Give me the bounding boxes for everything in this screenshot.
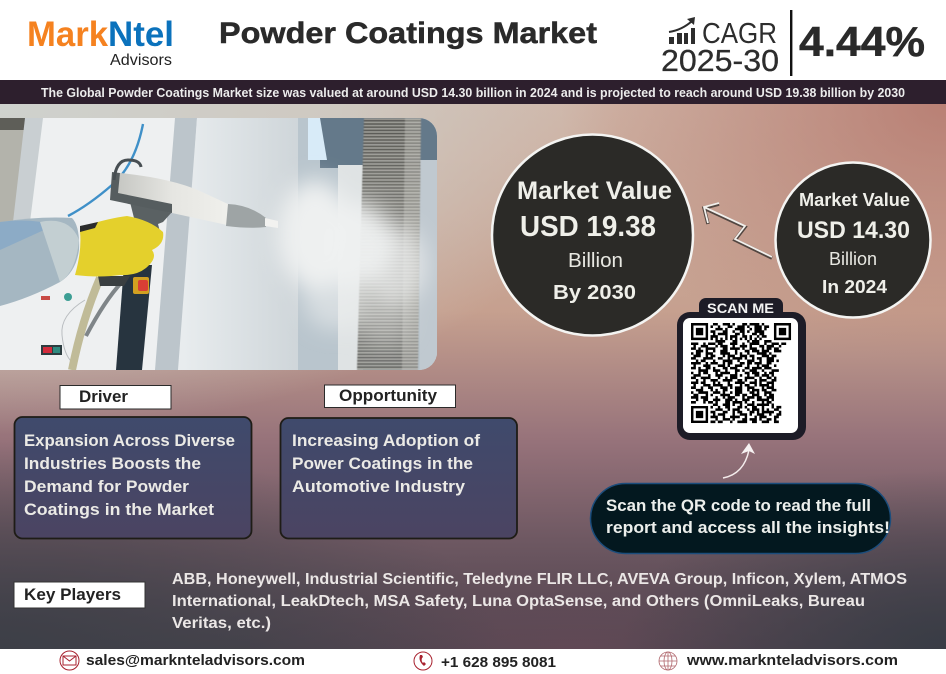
icon: growth bars and arrow [669,17,695,44]
indicators [41,293,72,355]
title: Powder Coatings Market [219,17,597,50]
text: key players list: International, LeakDtech, MSA Safety, Luna OptaSense, and Others (OmniLeaks, Bureau [172,593,865,610]
yellow glove [75,216,163,276]
spray cloud [277,180,427,346]
arrow: growth zigzag [704,203,772,258]
callout: scan the QR code: Scan the QR code to read the full [606,497,871,515]
logo: MarkNtel Advisors: Ntel [108,15,174,54]
panel: driver [14,417,252,538]
circle: market value 2024: USD 14.30 [797,217,910,244]
scan me tab [699,298,783,318]
summary bar: The Global Powder Coatings Market size was valued at around USD 14.30 billion in 2024 and is projected to reach around USD 19.38 billion by 2030 [41,86,905,100]
logo: MarkNtel Advisors: Advisors [110,52,172,69]
heading: Opportunity [324,385,456,408]
QR code card [677,298,806,440]
circle: market value 2030 [492,134,693,336]
callout: scan the QR code [590,484,890,554]
photo: powder coating spray gun [0,118,437,370]
blue hose [68,124,143,216]
logo: MarkNtel Advisors: Mark [27,15,109,54]
circle: market value 2024: In 2024 [822,277,887,297]
text: key players list: Veritas, etc.) [172,615,271,632]
circle: market value 2024 [776,162,930,318]
CAGR block: 4.44% [799,18,925,65]
panel: driver: Expansion Across Diverse [24,431,235,450]
summary bar [0,80,946,104]
icon: globe [659,652,677,670]
circle: market value 2024: Market Value [799,190,910,210]
text: key players list [172,571,907,632]
icon: mail [60,651,79,670]
heading: Driver [60,386,171,409]
footer: phone: +1 628 895 8081 [441,654,556,671]
heading: Key Players [14,582,145,608]
CAGR block: CAGR [702,18,777,50]
sleeve [0,218,79,306]
machine post [116,265,152,370]
scan me tab: SCAN ME [707,300,774,316]
panel: opportunity: Power Coatings in the [292,454,473,473]
arrow: curved pointer to QR [723,443,755,478]
CAGR block: 2025-30 [661,43,779,78]
footer: website: www.marknteladvisors.com [686,652,898,669]
icon: phone [414,652,432,670]
callout: scan the QR code: report and access all the insights! [606,519,890,537]
panel: driver: Coatings in the Market [24,500,214,519]
circle: market value 2030: Market Value [517,177,672,205]
QR modules [691,324,790,422]
footer band [0,649,946,674]
heading: Key Players: Key Players [24,586,121,604]
header band [0,0,946,80]
circle: market value 2030: By 2030 [553,282,636,304]
metal rack [357,118,421,370]
panel: driver: Industries Boosts the [24,454,201,473]
footer: email: sales@marknteladvisors.com [86,652,305,669]
circle: market value 2030: Billion [568,250,623,272]
panel: opportunity: Automotive Industry [292,477,466,496]
panel: driver: Demand for Powder [24,477,189,496]
logo: MarkNtel Advisors [27,15,174,69]
CAGR block [661,10,925,78]
gun body [110,158,278,229]
circle: market value 2030: USD 19.38 [520,211,656,243]
panel: opportunity [280,418,517,538]
heading: Opportunity: Opportunity [339,387,438,405]
heading: Driver: Driver [79,388,129,406]
text: key players list: ABB, Honeywell, Industrial Scientific, Teledyne FLIR LLC, AVEVA Group, Inficon, Xylem, ATMOS [172,571,907,588]
hoses [62,276,130,370]
circle: market value 2024: Billion [829,249,877,269]
panel: opportunity: Increasing Adoption of [292,431,480,450]
stop button [133,277,149,294]
